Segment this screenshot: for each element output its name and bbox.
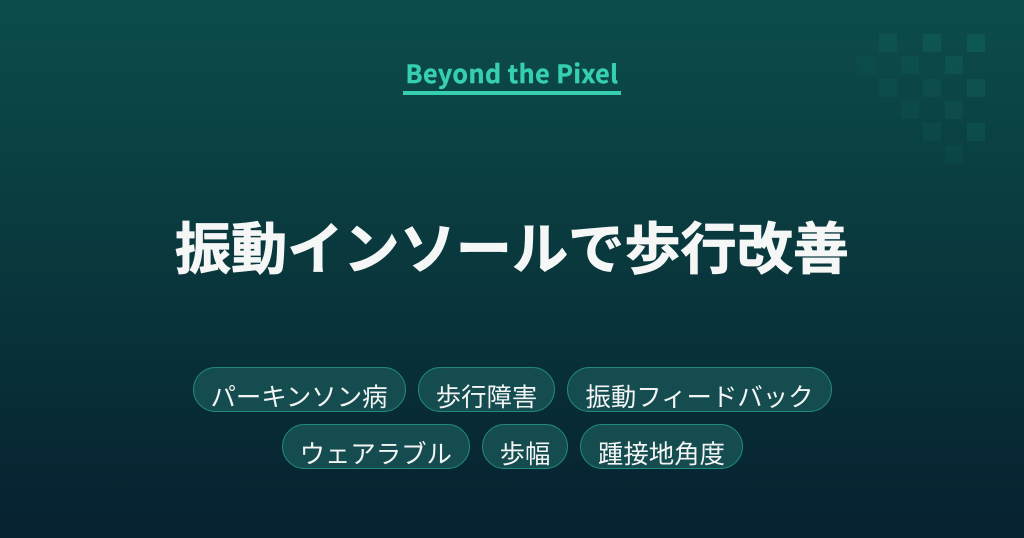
tag: ウェアラブル <box>282 424 470 469</box>
keyword tags <box>193 367 832 470</box>
tag: パーキンソン病 <box>193 367 406 412</box>
tag: パーキンソン病: パーキンソン病 <box>210 378 387 414</box>
tag: 踵接地角度 <box>580 424 743 469</box>
tag: ウェアラブル: ウェアラブル <box>300 434 452 470</box>
tag: 振動フィードバック: 振動フィードバック <box>585 378 814 414</box>
tag: 歩行障害 <box>418 367 555 412</box>
tag: 踵接地角度: 踵接地角度 <box>598 434 725 470</box>
brand heading: Beyond the Pixel <box>403 55 621 95</box>
decorative pixel grid <box>879 34 985 141</box>
tag: 歩幅 <box>482 424 568 469</box>
tag: 歩幅: 歩幅 <box>500 434 550 470</box>
brand name: Beyond the Pixel <box>405 55 618 91</box>
tag: 歩行障害: 歩行障害 <box>436 378 537 414</box>
tag: 振動フィードバック <box>567 367 832 412</box>
brand underline <box>403 91 621 95</box>
title: 振動インソールで歩行改善 <box>175 205 849 286</box>
